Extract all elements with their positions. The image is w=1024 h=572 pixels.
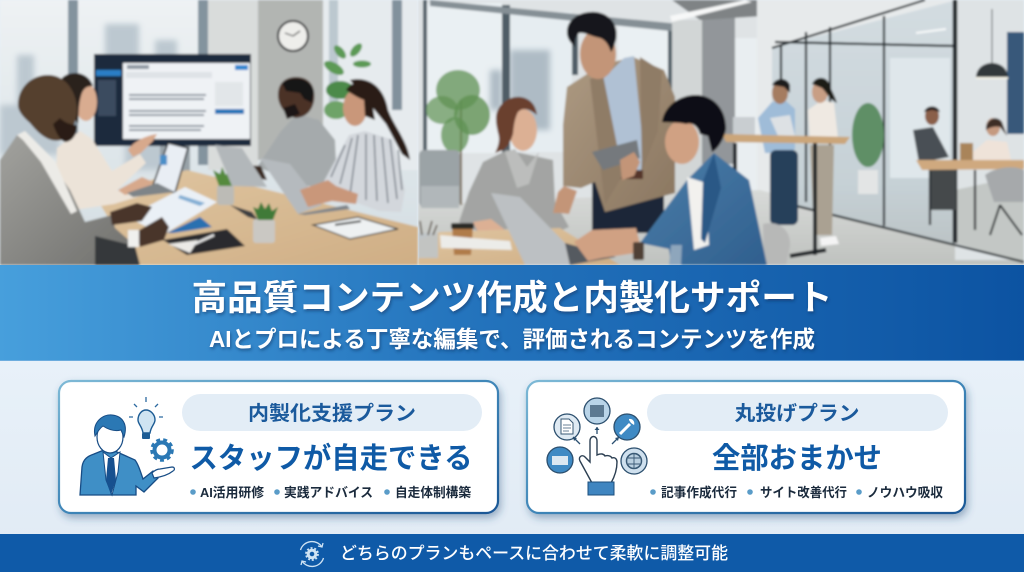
back room meeting pair [913, 106, 1024, 235]
feature bullets: AI活用研修 [200, 485, 264, 500]
plan name pill [647, 394, 948, 431]
footer bar [0, 534, 1024, 572]
footer message: どちらのプランもペースに合わせて柔軟に調整可能 [340, 544, 728, 563]
standing pair at high desk [722, 78, 850, 256]
person: seated woman [459, 97, 569, 242]
feature bullets [190, 485, 471, 500]
icon: adjustable gear cycle [300, 542, 324, 566]
person: man in grey sweater [243, 77, 337, 187]
pendant lamp [976, 9, 1008, 79]
potted plants [213, 167, 278, 243]
plan name pill: 丸投げプラン [734, 402, 860, 425]
monitor [94, 54, 251, 172]
icon: hand with service circles [547, 398, 647, 495]
feature bullets: 自走体制構築 [395, 485, 471, 500]
banner background [0, 265, 1024, 361]
person: standing man in tan jacket [553, 12, 675, 233]
plan headline: 全部おまかせ [712, 442, 882, 475]
back room plant [852, 103, 884, 194]
sofa [419, 150, 460, 208]
plan name pill [182, 394, 482, 431]
table top [100, 170, 418, 265]
feature bullets [650, 485, 943, 500]
heading: 高品質コンテンツ作成と内製化サポート [192, 279, 832, 318]
tall plant on left [426, 70, 490, 205]
person: woman in striped blouse [300, 79, 410, 212]
plan name pill: 内製化支援プラン [248, 402, 416, 425]
photo: team meeting around table (left) [0, 0, 418, 265]
plan headline: スタッフが自走できる [190, 441, 472, 475]
panel: in-house support plan [59, 381, 498, 513]
table front [418, 228, 620, 265]
photo: mentoring in open office (right) [418, 0, 1024, 265]
person: woman in cream blouse [56, 73, 157, 210]
feature bullets: サイト改善代行 [760, 485, 847, 500]
icon: business person with bulb and gear [80, 397, 174, 495]
feature bullets: 実践アドバイス [284, 485, 373, 500]
laptops [215, 145, 350, 215]
panel: full outsourcing plan [527, 381, 965, 513]
person: seated man in blue jacket [574, 95, 790, 265]
plant behind the right pair [322, 41, 371, 119]
feature bullets: 記事作成代行 [661, 485, 737, 500]
subheading: AIとプロによる丁寧な編集で、評価されるコンテンツを作成 [209, 326, 815, 352]
icon: wall clock [278, 21, 308, 51]
glass partition with back room [772, 0, 1024, 262]
laptop and desk items [418, 193, 616, 265]
person: man in grey suit [0, 75, 169, 265]
laptop, paper and documents on table [127, 143, 398, 255]
background: lower section [0, 361, 1024, 572]
feature bullets: ノウハウ吸収 [867, 485, 943, 500]
